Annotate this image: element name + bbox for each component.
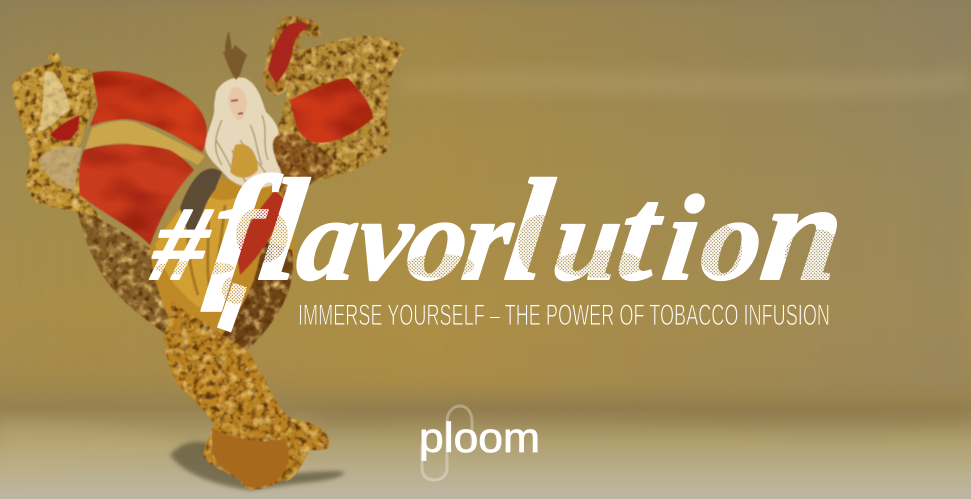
right wing: crumpled gold bbox=[270, 36, 405, 180]
gown: robe shadow folds bbox=[187, 205, 225, 295]
gown: yellow robe panel bbox=[155, 190, 245, 308]
headline text: v bbox=[350, 174, 422, 305]
feather crown bbox=[223, 31, 247, 80]
headline text: u bbox=[546, 174, 630, 305]
headline text: n bbox=[753, 156, 853, 310]
headline text: o bbox=[694, 174, 772, 305]
gown: lower skirt shine bbox=[212, 428, 288, 488]
right wing: red silk bbox=[290, 78, 373, 143]
hair strands bbox=[216, 115, 270, 185]
gold collar bbox=[230, 144, 258, 178]
right wing: upper curled tip bbox=[263, 16, 321, 96]
left wing: small red fold bbox=[50, 115, 80, 141]
left wing: crumpled gold bbox=[12, 52, 102, 218]
gown: flowing leg bbox=[164, 300, 329, 489]
headline text: f bbox=[201, 146, 287, 312]
ploom logo bbox=[419, 406, 540, 480]
gown: robe body bbox=[150, 178, 295, 352]
headline text: o bbox=[400, 174, 478, 305]
drape: right brown fold bbox=[222, 240, 293, 352]
headline text: l bbox=[497, 149, 561, 311]
face bbox=[228, 87, 247, 120]
red panel on robe bbox=[236, 190, 285, 275]
right wing: tip red bbox=[268, 22, 308, 84]
dark glove bbox=[180, 168, 222, 240]
hashtag headline bbox=[148, 172, 838, 332]
headline text: # bbox=[146, 185, 218, 302]
figure in gold and red gown bbox=[12, 16, 405, 489]
headline text: l bbox=[251, 149, 315, 311]
right sleeve folds bbox=[262, 134, 333, 205]
left wing: upper red silk bbox=[90, 71, 207, 152]
left wing: pale highlight bbox=[38, 71, 70, 131]
headline text: i bbox=[656, 171, 709, 306]
lips and eye bbox=[231, 100, 243, 114]
drape: left lower veil bbox=[76, 205, 176, 342]
f descender brush stroke bbox=[224, 285, 240, 330]
headline text: a bbox=[290, 174, 368, 305]
headline text: t bbox=[610, 160, 672, 309]
left wing: lower red silk bbox=[79, 144, 194, 245]
blonde hair bbox=[205, 78, 281, 188]
logo wordmark: ploom bbox=[419, 414, 540, 461]
headline text: r bbox=[456, 174, 522, 305]
logo loop bbox=[422, 406, 472, 480]
floor shadow bbox=[170, 442, 345, 490]
left wing: gold sash bbox=[85, 121, 205, 165]
